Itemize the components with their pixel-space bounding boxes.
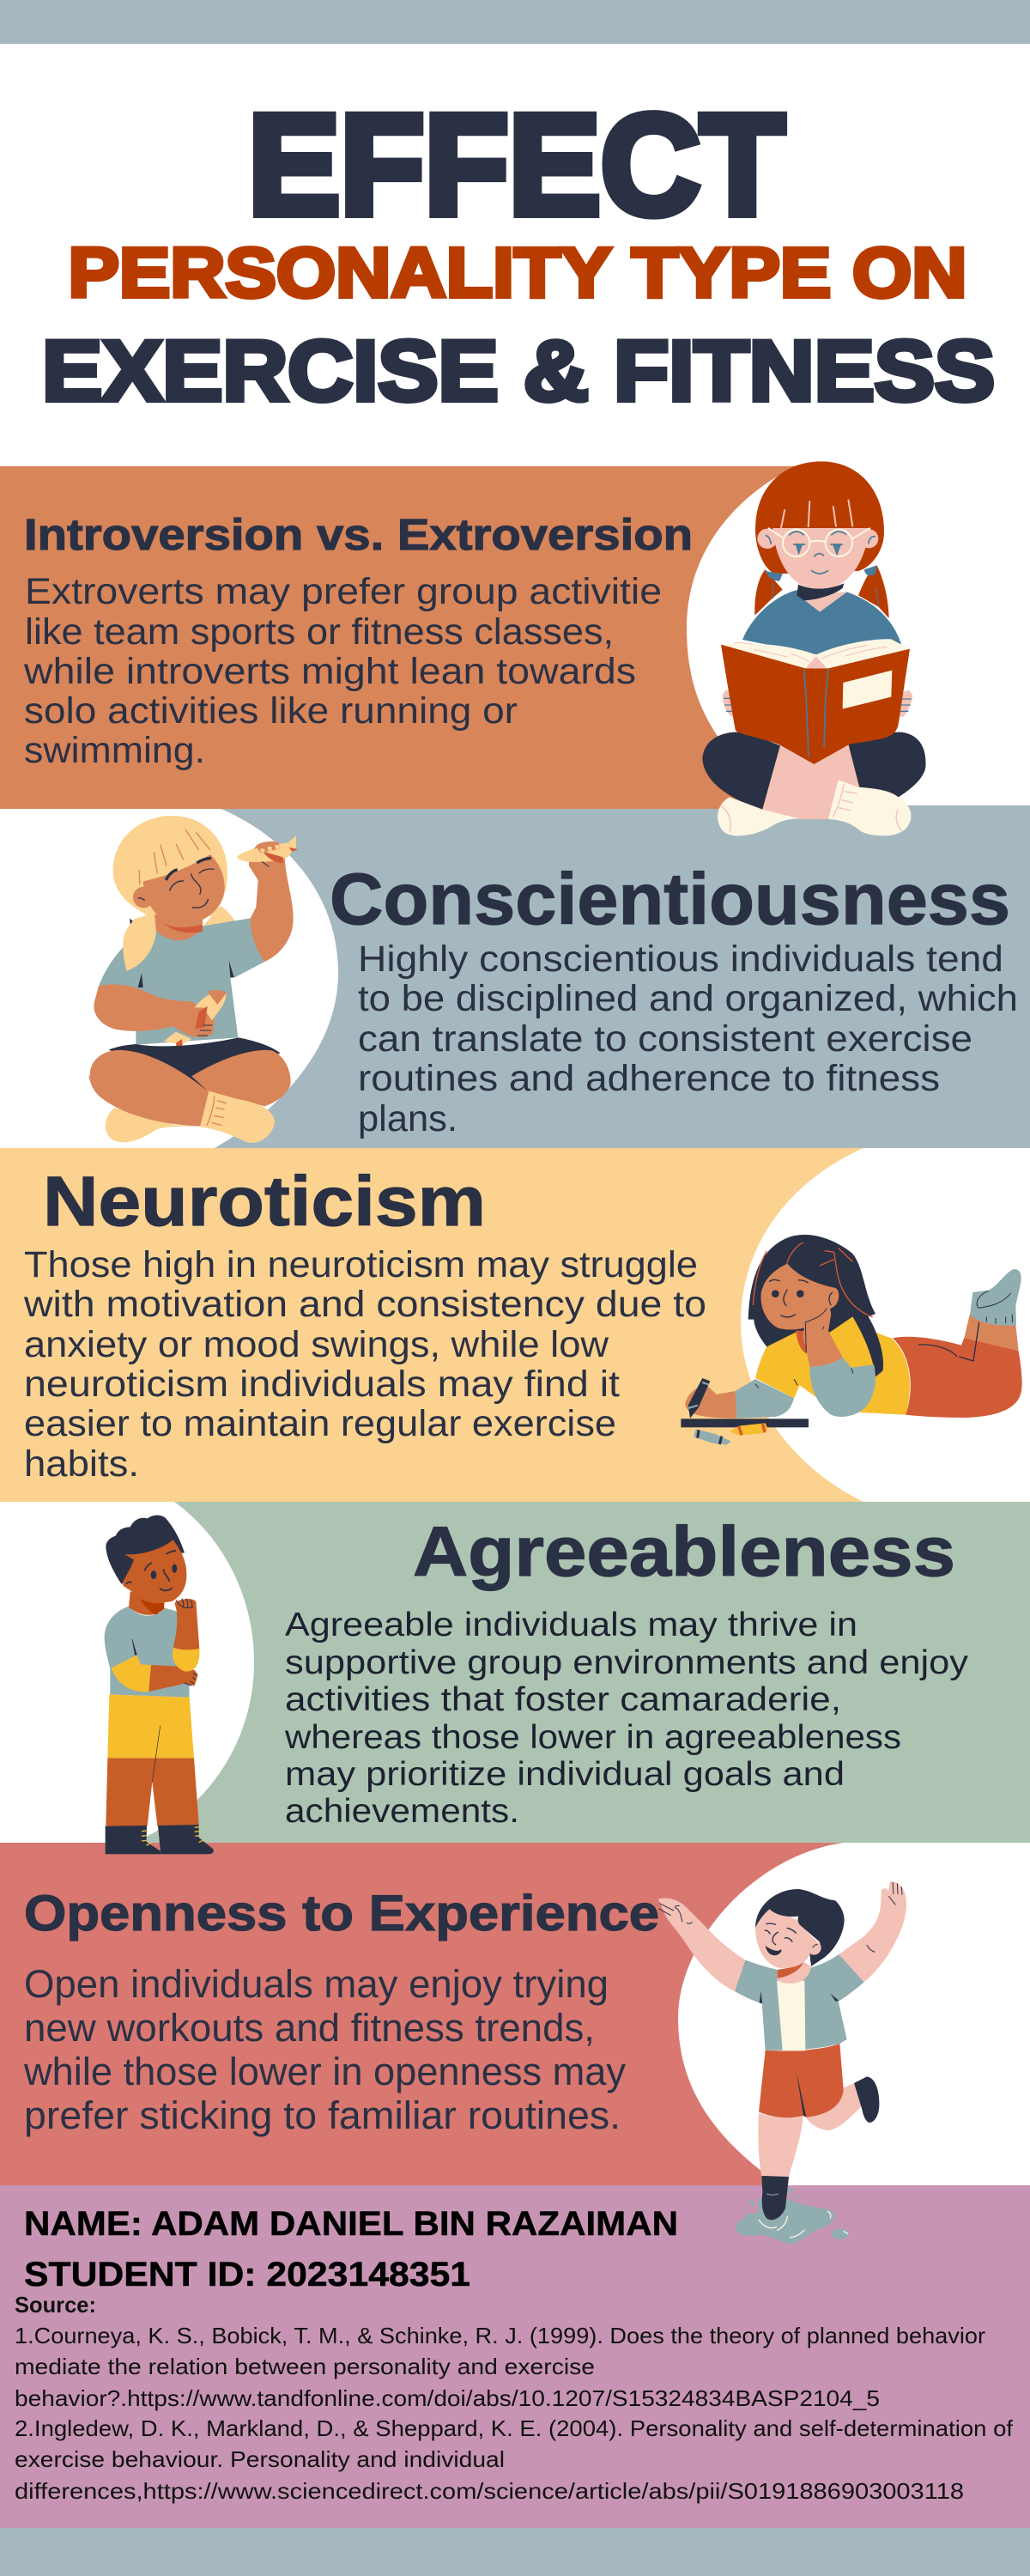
body: conscientiousness: plans. — [358, 1098, 457, 1139]
body: neuroticism: easier to maintain regular exercise — [24, 1403, 616, 1444]
body: agreeableness: activities that foster camaraderie, — [285, 1681, 841, 1718]
body: neuroticism: Those high in neuroticism may struggle — [24, 1244, 698, 1285]
body: neuroticism: anxiety or mood swings, while low — [24, 1324, 609, 1365]
body: openness — [23, 1962, 627, 2137]
title: EFFECT — [248, 86, 785, 245]
body: conscientiousness: to be disciplined and organized, which — [358, 978, 1018, 1019]
heading: neuroticism: Neuroticism — [43, 1163, 486, 1241]
body: neuroticism: with motivation and consistency due to — [23, 1284, 706, 1325]
student id: STUDENT ID: 2023148351 — [24, 2256, 470, 2293]
icon: jumping child in puddle — [658, 1882, 906, 2244]
panel: sources and student details — [0, 2185, 1030, 2528]
body: openness: new workouts and fitness trends, — [24, 2006, 595, 2050]
icon: thinking boy — [105, 1516, 214, 1854]
bottom bar — [0, 2528, 1030, 2576]
body: openness: while those lower in openness may — [23, 2050, 627, 2093]
heading: openness: Openness to Experience — [24, 1886, 659, 1941]
top bar — [0, 0, 1030, 44]
body: agreeableness: Agreeable individuals may thrive in — [285, 1607, 857, 1643]
body: agreeableness: whereas those lower in agreeableness — [284, 1719, 901, 1756]
source references: mediate the relation between personality and exercise — [15, 2354, 595, 2379]
source references: exercise behaviour. Personality and individual — [15, 2446, 505, 2472]
title: PERSONALITY TYPE ON — [69, 234, 966, 313]
source references: differences,https://www.sciencedirect.com/science/article/abs/pii/S0191886903003118 — [15, 2478, 964, 2504]
body: introversion: swimming. — [24, 730, 205, 771]
panel: introversion vs extroversion — [0, 461, 926, 835]
heading: conscientiousness: Conscientiousness — [330, 859, 1010, 939]
body: neuroticism: neuroticism individuals may find it — [24, 1364, 620, 1405]
body: introversion: solo activities like running or — [24, 690, 518, 732]
body: introversion: Extroverts may prefer group activitie — [25, 571, 662, 612]
body: agreeableness: supportive group environments and enjoy — [285, 1644, 969, 1681]
body: conscientiousness: can translate to consistent exercise — [358, 1018, 972, 1060]
heading: introversion: Introversion vs. Extroversion — [24, 510, 693, 559]
source references: behavior?.https://www.tandfonline.com/doi/abs/10.1207/S15324834BASP2104_5 — [15, 2385, 880, 2411]
student name: NAME: ADAM DANIEL BIN RAZAIMAN — [24, 2205, 678, 2243]
body: neuroticism — [23, 1244, 706, 1485]
body: introversion — [23, 571, 662, 771]
panel: agreeableness — [105, 1502, 1030, 1854]
source references: Source: — [15, 2292, 96, 2318]
title: EXERCISE & FITNESS — [42, 323, 995, 418]
icon: girl reading a book — [702, 461, 926, 835]
body: openness: Open individuals may enjoy trying — [24, 1962, 609, 2006]
body: openness: prefer sticking to familiar routines. — [24, 2093, 621, 2137]
body: agreeableness: achievements. — [285, 1793, 519, 1830]
body: neuroticism: habits. — [24, 1443, 139, 1485]
panel: neuroticism — [0, 1148, 1022, 1502]
panel: openness to experience — [0, 1843, 906, 2244]
body: agreeableness: may prioritize individual goals and — [285, 1756, 845, 1793]
icon: girl lying down drawing — [681, 1235, 1022, 1445]
body: agreeableness — [284, 1607, 969, 1830]
panel: conscientiousness — [88, 805, 1030, 1148]
source references: 2.Ingledew, D. K., Markland, D., & Sheppard, K. E. (2004). Personality and self-determination of — [15, 2415, 1014, 2441]
body: introversion: like team sports or fitness classes, — [25, 611, 614, 653]
body: introversion: while introverts might lean towards — [23, 651, 636, 692]
source references: 1.Courneya, K. S., Bobick, T. M., & Schinke, R. J. (1999). Does the theory of planned behavior — [15, 2323, 985, 2348]
title — [42, 86, 995, 418]
source references — [15, 2292, 1014, 2504]
body: conscientiousness — [358, 939, 1018, 1139]
body: conscientiousness: routines and adherence to fitness — [358, 1058, 940, 1099]
icon: girl playing with toy planes — [88, 816, 298, 1143]
heading: agreeableness: Agreeableness — [413, 1513, 955, 1591]
body: conscientiousness: Highly conscientious individuals tend — [358, 939, 1003, 980]
